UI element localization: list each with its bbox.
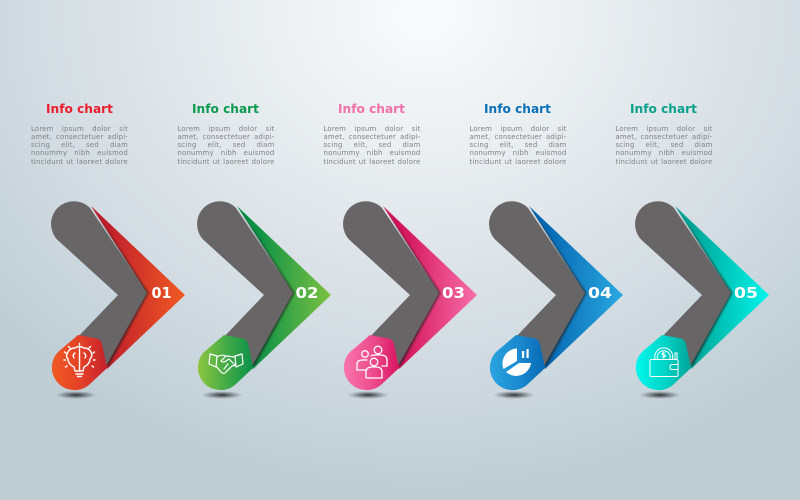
text block 4: nonummy nibh euismod bbox=[470, 149, 566, 157]
text block 5: amet, consectetuer adipi- bbox=[616, 133, 712, 141]
grey band bbox=[489, 201, 585, 366]
shadow under badge bbox=[639, 391, 681, 399]
text block 2: Lorem ipsum dolor sit bbox=[178, 124, 274, 132]
arrow tip bbox=[383, 206, 477, 369]
badge bbox=[52, 335, 107, 390]
text block 5: scing elit, sed diam bbox=[616, 141, 712, 149]
icon: people bbox=[357, 346, 387, 378]
icon: wallet: $ bbox=[661, 350, 667, 360]
text block 3 bbox=[324, 124, 420, 166]
text block 3: tincidunt ut laoreet dolore bbox=[324, 158, 420, 166]
chevron 01 bbox=[51, 201, 185, 399]
text block 5: Lorem ipsum dolor sit bbox=[616, 124, 712, 132]
icon: light bulb brain bbox=[64, 344, 95, 376]
title 1: Info chart bbox=[46, 101, 113, 116]
text block 4: Lorem ipsum dolor sit bbox=[470, 124, 566, 132]
number: 01 bbox=[152, 284, 172, 302]
edge shadow bbox=[238, 207, 294, 367]
icon: pie chart bbox=[502, 348, 531, 376]
text block 5: tincidunt ut laoreet dolore bbox=[616, 158, 712, 166]
edge shadow bbox=[676, 207, 732, 367]
shadow under badge bbox=[201, 391, 243, 399]
arrow tip bbox=[237, 206, 331, 369]
number: 05 bbox=[734, 284, 758, 302]
grey band bbox=[635, 201, 731, 366]
text block 2 bbox=[178, 124, 274, 166]
text block 4 bbox=[470, 124, 566, 166]
text block 2: nonummy nibh euismod bbox=[178, 149, 274, 157]
chevron 03 bbox=[343, 201, 477, 399]
icon: handshake bbox=[209, 354, 243, 373]
badge bbox=[344, 335, 399, 390]
shadow under badge bbox=[493, 391, 535, 399]
text block 2: tincidunt ut laoreet dolore bbox=[178, 158, 274, 166]
edge shadow bbox=[530, 207, 586, 367]
text block 4: amet, consectetuer adipi- bbox=[470, 133, 566, 141]
text block 2: amet, consectetuer adipi- bbox=[178, 133, 274, 141]
text block 1: amet, consectetuer adipi- bbox=[31, 133, 128, 141]
number: 02 bbox=[296, 284, 318, 302]
text block 4: scing elit, sed diam bbox=[470, 141, 566, 149]
title 2: Info chart bbox=[192, 101, 259, 116]
text block 3: nonummy nibh euismod bbox=[324, 149, 420, 157]
arrow tip bbox=[675, 206, 769, 369]
chevron 04 bbox=[489, 201, 623, 399]
text block 1: nonummy nibh euismod bbox=[31, 149, 128, 157]
arrow tip bbox=[529, 206, 623, 369]
grey band bbox=[343, 201, 439, 366]
title 4: Info chart bbox=[484, 101, 551, 116]
grey band bbox=[197, 201, 293, 366]
badge bbox=[636, 335, 691, 390]
text block 2: scing elit, sed diam bbox=[178, 141, 274, 149]
number: 04 bbox=[588, 284, 612, 302]
chevron 05 bbox=[635, 201, 769, 399]
text block 1: Lorem ipsum dolor sit bbox=[31, 124, 128, 132]
arrow tip bbox=[91, 206, 185, 369]
badge bbox=[198, 335, 253, 390]
shadow under badge bbox=[347, 391, 389, 399]
number: 03 bbox=[442, 284, 465, 302]
text block 1 bbox=[31, 124, 128, 166]
text block 4: tincidunt ut laoreet dolore bbox=[470, 158, 566, 166]
title 5: Info chart bbox=[630, 101, 697, 116]
chevron 02 bbox=[197, 201, 331, 399]
grey band bbox=[51, 201, 147, 366]
text block 5 bbox=[616, 124, 712, 166]
title 3: Info chart bbox=[338, 101, 405, 116]
badge bbox=[490, 335, 545, 390]
text block 3: scing elit, sed diam bbox=[324, 141, 420, 149]
edge shadow bbox=[92, 207, 148, 367]
text block 3: Lorem ipsum dolor sit bbox=[324, 124, 420, 132]
text block 1: tincidunt ut laoreet dolore bbox=[31, 158, 128, 166]
text block 1: scing elit, sed diam bbox=[31, 141, 128, 149]
text block 5: nonummy nibh euismod bbox=[616, 149, 712, 157]
icon: wallet bbox=[650, 348, 678, 376]
text block 3: amet, consectetuer adipi- bbox=[324, 133, 420, 141]
shadow under badge bbox=[55, 391, 97, 399]
edge shadow bbox=[384, 207, 440, 367]
